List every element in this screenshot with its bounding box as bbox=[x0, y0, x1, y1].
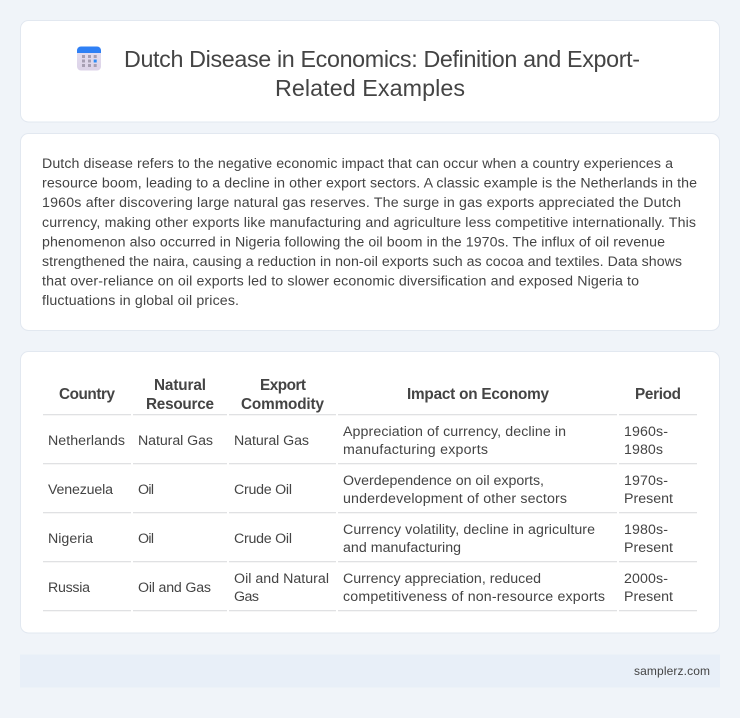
table row: Venezuela: Crude Oil bbox=[234, 482, 292, 498]
panel: data table bbox=[20, 352, 720, 633]
table header row: Impact on Economy bbox=[407, 386, 549, 403]
table header row: Resource bbox=[146, 396, 214, 413]
table row: Venezuela: Overdependence on oil exports, bbox=[343, 473, 544, 489]
table row: Nigeria: Present bbox=[624, 540, 673, 556]
footer bar bbox=[20, 654, 720, 688]
table row: Netherlands: Natural Gas bbox=[234, 433, 309, 449]
panel: description bbox=[20, 134, 720, 330]
table row: Russia: Russia bbox=[48, 580, 90, 596]
table row: Russia: Oil and Natural bbox=[234, 571, 329, 587]
table header row: Country bbox=[59, 386, 115, 403]
table row: Russia: Currency appreciation, reduced bbox=[343, 571, 541, 587]
table row: Russia: 2000s- bbox=[624, 571, 668, 587]
table row: Nigeria: Crude Oil bbox=[234, 531, 292, 547]
table row: Venezuela: Oil bbox=[138, 482, 154, 498]
title bbox=[124, 46, 640, 101]
title: Related Examples bbox=[275, 75, 465, 101]
text block: definition paragraph: resource boom, leading to a decline in other export sectors. A classic example is the Netherlands in the bbox=[42, 176, 697, 192]
table row: Russia: Gas bbox=[234, 589, 259, 605]
text block: definition paragraph: 1960s after discovering large natural gas reserves. The surge in gas exports appreciated the Dutch bbox=[42, 195, 681, 211]
footer source text: samplerz.com bbox=[634, 664, 710, 678]
table row: Netherlands: Netherlands bbox=[48, 433, 125, 449]
table header row: Export bbox=[260, 377, 306, 394]
table row: Nigeria: Currency volatility, decline in agriculture bbox=[343, 522, 595, 538]
table row: Netherlands bbox=[48, 424, 668, 458]
table row: Venezuela: Venezuela bbox=[48, 482, 113, 498]
text block: definition paragraph: currency, making other exports like manufacturing and agriculture less competitive internationally. This bbox=[42, 215, 696, 231]
table row: Netherlands: Natural Gas bbox=[138, 433, 213, 449]
table row: Nigeria: and manufacturing bbox=[343, 540, 461, 556]
panel: title card bbox=[20, 20, 720, 122]
text block: definition paragraph bbox=[42, 156, 697, 309]
icon: calendar bbox=[77, 46, 101, 70]
table row: Netherlands: 1980s bbox=[624, 442, 663, 458]
table row: Venezuela: Present bbox=[624, 491, 673, 507]
text block: definition paragraph: that over-reliance on oil exports led to slower economic diversification and exposed Nigeria to bbox=[42, 274, 639, 290]
table header row: Period bbox=[635, 386, 681, 403]
table row: Venezuela: 1970s- bbox=[624, 473, 668, 489]
table row: Nigeria: Nigeria bbox=[48, 531, 93, 547]
table row: Netherlands: Appreciation of currency, decline in bbox=[343, 424, 566, 440]
text block: definition paragraph: Dutch disease refers to the negative economic impact that can occur when a country experiences a bbox=[42, 156, 673, 172]
table row: Russia: competitiveness of non-resource exports bbox=[343, 589, 605, 605]
table row: Nigeria: 1980s- bbox=[624, 522, 668, 538]
text block: definition paragraph: strengthened the naira, causing a reduction in non-oil exports such as cocoa and textiles. Data shows bbox=[42, 254, 682, 270]
table header row bbox=[59, 377, 681, 413]
text block: definition paragraph: phenomenon also occurred in Nigeria following the oil boom in the 1970s. The influx of oil revenue bbox=[42, 234, 665, 250]
table header row: Natural bbox=[154, 377, 206, 394]
table row: Venezuela bbox=[48, 473, 673, 507]
table row: Netherlands: 1960s- bbox=[624, 424, 668, 440]
title: Dutch Disease in Economics: Definition and Export- bbox=[124, 46, 640, 72]
text block: definition paragraph: fluctuations in global oil prices. bbox=[42, 293, 239, 309]
table row: Netherlands: manufacturing exports bbox=[343, 442, 488, 458]
table row: Nigeria bbox=[48, 522, 673, 556]
table row: Russia: Present bbox=[624, 589, 673, 605]
table row: Russia: Oil and Gas bbox=[138, 580, 211, 596]
table row: Venezuela: underdevelopment of other sectors bbox=[343, 491, 567, 507]
table row: Nigeria: Oil bbox=[138, 531, 154, 547]
table header row: Commodity bbox=[241, 396, 324, 413]
table row: Russia bbox=[48, 571, 673, 605]
